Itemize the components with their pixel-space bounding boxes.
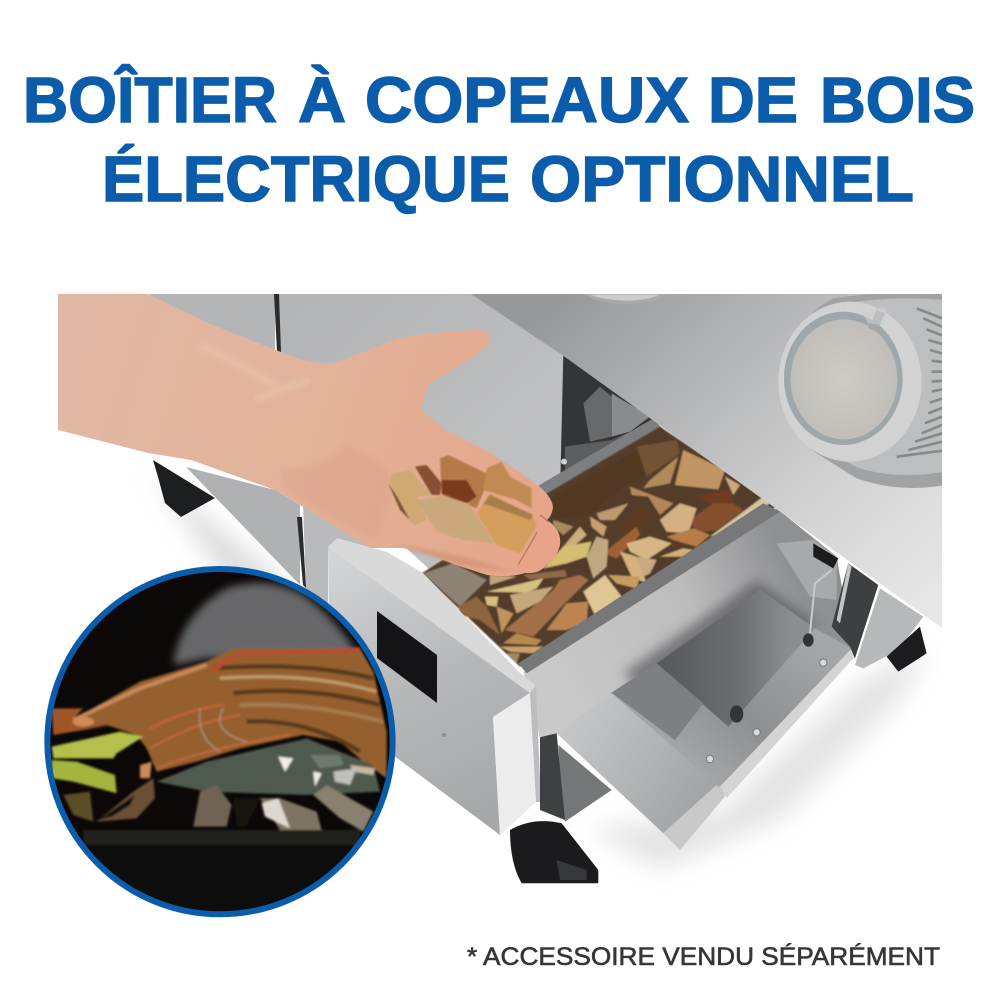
meat on grill	[72, 648, 387, 778]
drawer front wall	[518, 503, 853, 797]
title: À	[298, 64, 346, 136]
photo: grill with wood chip drawer	[58, 292, 945, 883]
side slot with hinge bracket	[537, 353, 663, 498]
title: ÉLECTRIQUE	[102, 143, 510, 215]
footnote: * ACCESSOIRE VENDU SÉPARÉMENT	[467, 942, 940, 971]
floor shadows	[150, 470, 930, 870]
title: BOÎTIER	[23, 63, 277, 136]
title: BOIS	[820, 64, 975, 136]
drawer side plate	[328, 538, 541, 835]
right hinge, cabinet and wheel	[810, 543, 927, 672]
drop-down tray	[557, 590, 855, 850]
drawer interior and wood chips	[422, 427, 777, 667]
hand and arm	[58, 294, 560, 576]
title: DE	[708, 64, 798, 136]
title: COPEAUX	[365, 64, 689, 136]
side handle slot	[377, 611, 437, 703]
control panel top	[471, 294, 942, 628]
small knob	[584, 294, 660, 304]
grill left wheel	[153, 460, 215, 517]
grill cabinet doors	[150, 294, 568, 612]
control knob	[778, 292, 945, 488]
wood chips held in hand	[388, 455, 537, 553]
title	[23, 63, 975, 215]
title: OPTIONNEL	[530, 143, 914, 215]
drawer leg and front wheel	[510, 733, 612, 883]
inset circle: smoking wood chips on grill	[40, 569, 400, 925]
smoke cloud	[173, 583, 360, 665]
